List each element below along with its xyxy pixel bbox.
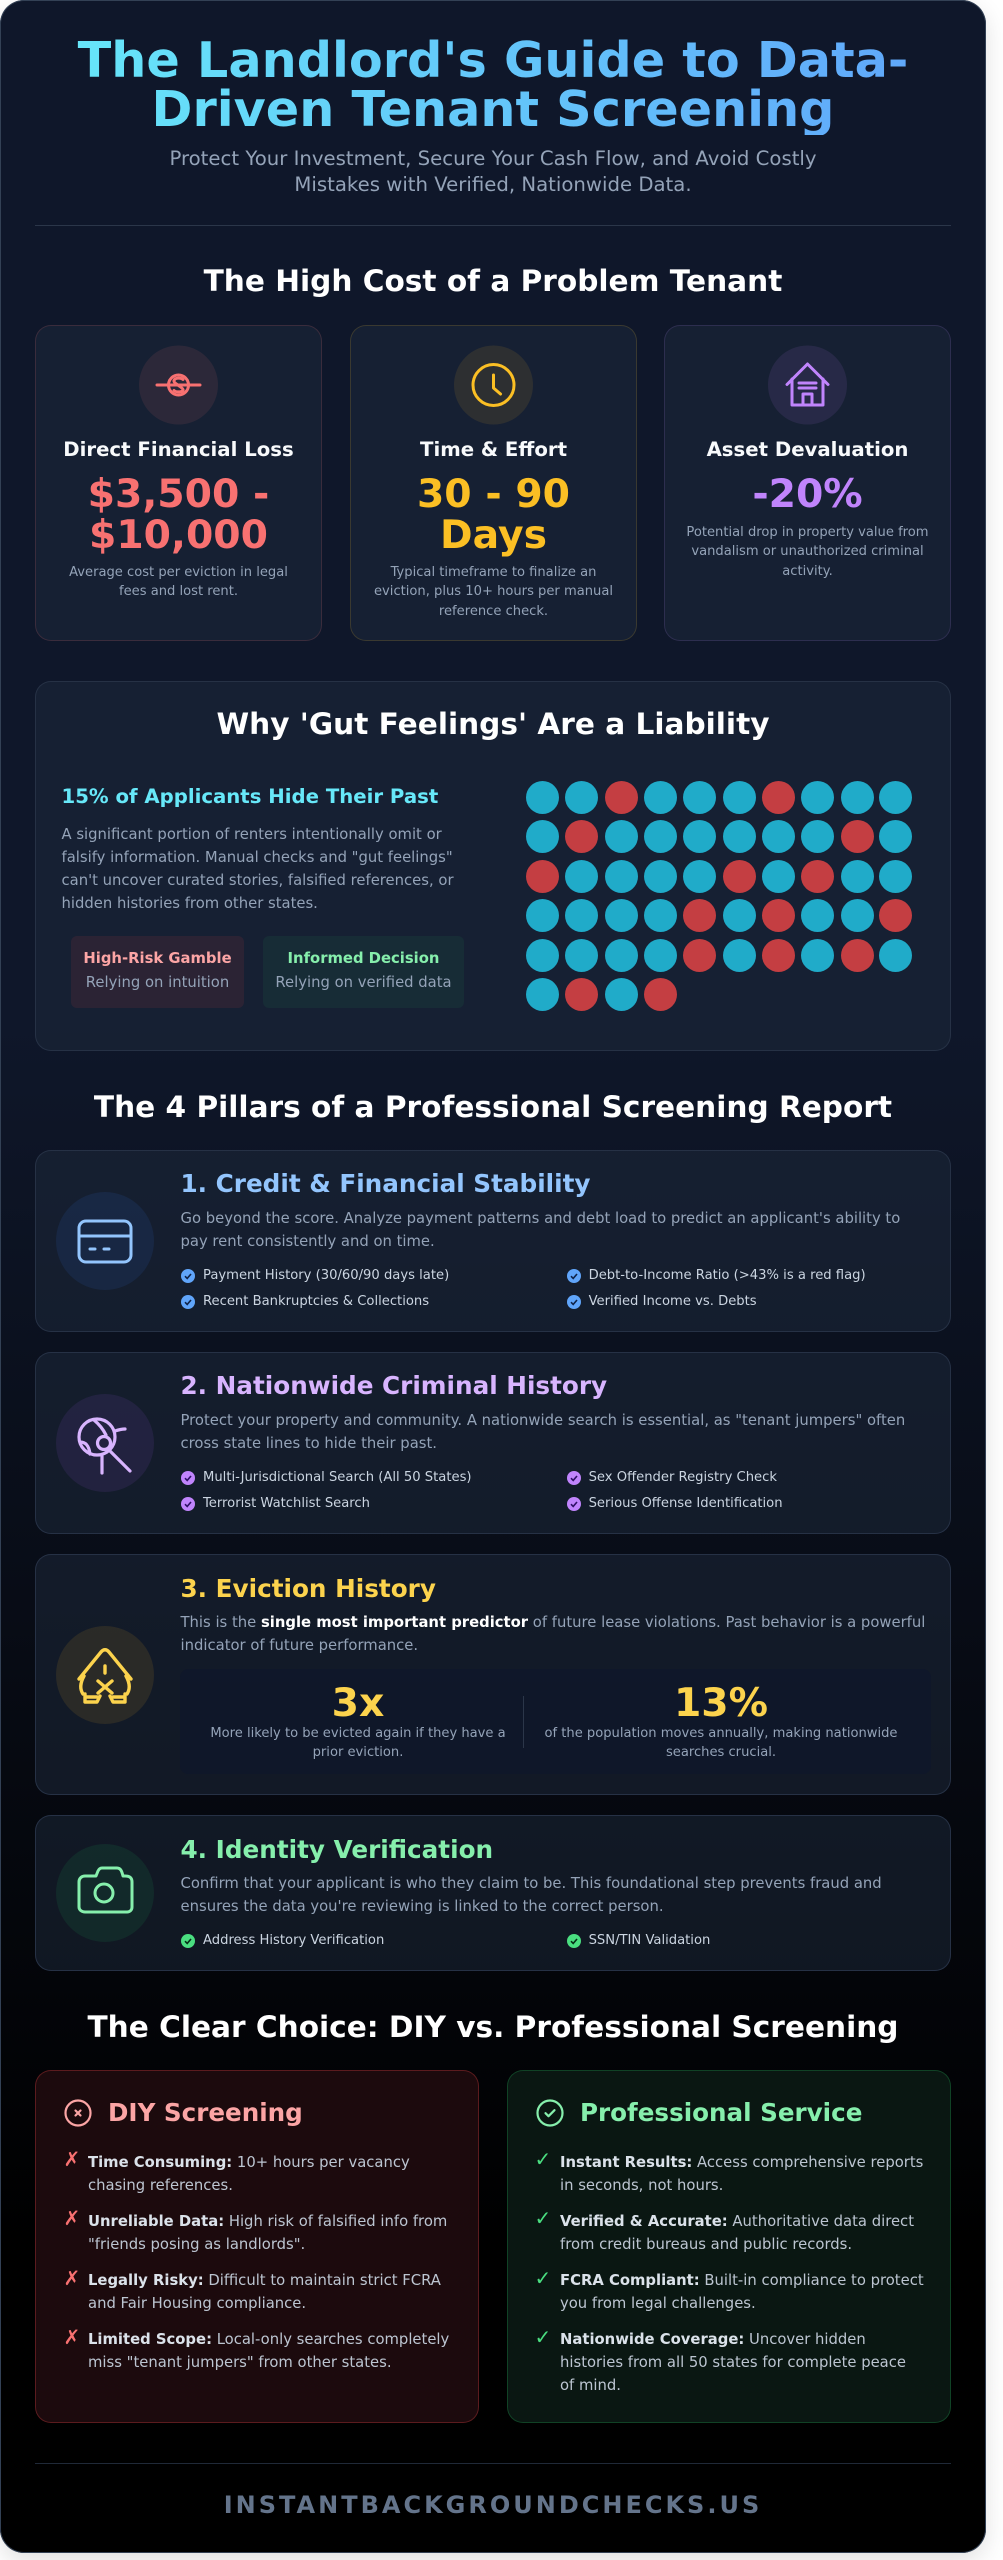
pillar description xyxy=(180,1412,905,1452)
list: DIY drawbacks: Unreliable Data: High risk of falsified info from xyxy=(88,2213,447,2230)
list: professional benefits xyxy=(534,2147,924,2394)
stat: Days xyxy=(440,513,547,558)
card title: Time & Effort xyxy=(420,438,567,460)
heading: four pillars: The 4 Pillars of a Professional Screening Report xyxy=(94,1090,892,1124)
callout: informed decision: Informed Decision xyxy=(288,950,439,967)
panel: direct financial loss xyxy=(35,325,322,641)
stat: 30 - 90 xyxy=(417,472,570,517)
checklist xyxy=(181,1933,710,1948)
description: vandalism or unauthorized criminal xyxy=(691,544,924,559)
checklist: Recent Bankruptcies & Collections xyxy=(203,1294,429,1309)
stat xyxy=(88,472,269,558)
pillar description: This is the single most important predictor of future lease violations. Past behavior is a powerful xyxy=(180,1614,925,1631)
list: professional benefits: Nationwide Coverage: Uncover hidden xyxy=(560,2331,866,2348)
icon: camera xyxy=(56,1844,154,1942)
list: DIY drawbacks: ✗ xyxy=(64,2147,80,2171)
panel: pillar 4 identity xyxy=(35,1815,951,1971)
pillar description: Protect your property and community. A nationwide search is essential, as "tenant jumpers" often xyxy=(180,1412,905,1429)
list: professional benefits: of mind. xyxy=(560,2377,621,2394)
checklist: Multi-Jurisdictional Search (All 50 States) xyxy=(203,1470,472,1485)
pillar title: 4. Identity Verification xyxy=(180,1835,493,1864)
panel: pillar 1 credit xyxy=(35,1150,951,1332)
paragraph: falsify information. Manual checks and "gut feelings" xyxy=(62,849,453,866)
description: Potential drop in property value from xyxy=(686,524,929,540)
description: Average cost per eviction in legal xyxy=(69,564,288,580)
paragraph xyxy=(62,826,454,912)
list: professional benefits: ✓ xyxy=(534,2206,551,2230)
checklist: SSN/TIN Validation xyxy=(589,1933,710,1948)
stats box xyxy=(180,1669,931,1774)
callout: high-risk gamble xyxy=(71,936,244,1008)
stat: 3x xyxy=(210,1681,506,1760)
description xyxy=(374,564,613,619)
list: professional benefits: ✓ xyxy=(534,2266,551,2290)
paragraph: hidden histories from other states. xyxy=(62,895,318,912)
icon: house xyxy=(768,346,847,424)
panel: professional service xyxy=(507,2070,951,2423)
description: fees and lost rent. xyxy=(119,584,238,599)
panel: pillar 3 eviction xyxy=(35,1554,951,1795)
pillar description: cross state lines to hide their past. xyxy=(180,1435,437,1452)
panel: gut feelings xyxy=(35,681,951,1051)
title: Driven Tenant Screening xyxy=(152,80,834,138)
subtitle xyxy=(169,147,817,196)
list: professional benefits: Instant Results: Access comprehensive reports xyxy=(560,2154,923,2170)
stat: 3x: More likely to be evicted again if they have a xyxy=(210,1726,506,1740)
list: DIY drawbacks: chasing references. xyxy=(88,2176,233,2194)
heading: Why 'Gut Feelings' Are a Liability xyxy=(216,707,770,741)
heading: high cost: The High Cost of a Problem Tenant xyxy=(204,264,782,298)
checklist: Address History Verification xyxy=(203,1933,384,1948)
checklist: Serious Offense Identification xyxy=(589,1496,783,1511)
subtitle: Protect Your Investment, Secure Your Cash Flow, and Avoid Costly xyxy=(169,147,817,170)
stat: $3,500 - xyxy=(88,472,269,517)
description: Typical timeframe to finalize an xyxy=(391,564,596,580)
list: DIY drawbacks: Limited Scope: Local-only searches completely xyxy=(88,2331,449,2348)
list: DIY drawbacks: Time Consuming: 10+ hours per vacancy xyxy=(88,2154,410,2170)
pillar description: Confirm that your applicant is who they claim to be. This foundational step prevents fraud and xyxy=(180,1875,882,1892)
description xyxy=(69,564,288,599)
panel: time and effort xyxy=(350,325,637,641)
description: activity. xyxy=(782,564,833,579)
list: professional benefits: ✓ xyxy=(534,2147,551,2171)
panel: pillar 2 criminal xyxy=(35,1352,951,1534)
icon: x circle xyxy=(64,2099,92,2127)
chart: dot grid 15 percent xyxy=(526,781,912,1011)
list: professional benefits: histories from all 50 states for complete peace xyxy=(560,2354,906,2371)
list: DIY drawbacks: ✗ xyxy=(64,2206,80,2230)
icon: globe search xyxy=(56,1394,154,1492)
description: reference check. xyxy=(439,604,548,619)
description: eviction, plus 10+ hours per manual xyxy=(374,584,613,599)
pillar title: 2. Nationwide Criminal History xyxy=(180,1371,607,1400)
callout: high-risk gamble: Relying on intuition xyxy=(86,974,229,991)
list: DIY drawbacks: and Fair Housing compliance. xyxy=(88,2295,306,2312)
panel heading: Professional Service xyxy=(580,2098,862,2127)
card title: Direct Financial Loss xyxy=(63,438,294,460)
pillar title: 1. Credit & Financial Stability xyxy=(180,1169,590,1198)
list: DIY drawbacks: ✗ xyxy=(64,2266,80,2290)
icon: house warning xyxy=(56,1626,154,1724)
pillar description xyxy=(180,1614,925,1654)
stat: 3x: 3x xyxy=(332,1681,384,1726)
heading: clear choice: The Clear Choice: DIY vs. Professional Screening xyxy=(87,2010,898,2044)
list: DIY drawbacks: miss "tenant jumpers" from other states. xyxy=(88,2354,392,2371)
paragraph: can't uncover curated stories, falsified references, or xyxy=(62,872,454,889)
checklist: Payment History (30/60/90 days late) xyxy=(203,1268,449,1283)
pillar description: ensures the data you're reviewing is linked to the correct person. xyxy=(180,1898,664,1915)
pillar description: pay rent consistently and on time. xyxy=(180,1233,435,1250)
card title: Asset Devaluation xyxy=(707,438,908,460)
pillar title: 3. Eviction History xyxy=(180,1574,436,1602)
list: DIY drawbacks: ✗ xyxy=(64,2324,80,2348)
title xyxy=(35,36,951,135)
pillar description: indicator of future performance. xyxy=(180,1637,418,1654)
panel: DIY screening xyxy=(35,2070,479,2423)
icon: clock xyxy=(454,346,533,424)
list: DIY drawbacks xyxy=(64,2147,449,2371)
panel heading: DIY Screening xyxy=(108,2098,303,2127)
subheading: 15% of Applicants Hide Their Past xyxy=(62,785,438,808)
list: professional benefits: you from legal challenges. xyxy=(560,2295,756,2312)
panel: asset devaluation xyxy=(664,325,951,641)
checklist xyxy=(181,1268,866,1309)
icon: check circle xyxy=(536,2099,564,2127)
stat: 13 percent: of the population moves annually, making nationwide xyxy=(544,1726,898,1740)
checklist: Sex Offender Registry Check xyxy=(589,1470,777,1485)
checklist: Verified Income vs. Debts xyxy=(589,1294,757,1309)
checklist: Terrorist Watchlist Search xyxy=(203,1496,370,1511)
pillar description xyxy=(180,1210,900,1250)
list: professional benefits: in seconds, not hours. xyxy=(560,2176,723,2194)
list: professional benefits: from credit bureaus and public records. xyxy=(560,2236,852,2253)
callout: informed decision: Relying on verified data xyxy=(275,974,452,991)
stat: 13 percent: 13% xyxy=(674,1681,768,1726)
title: The Landlord's Guide to Data- xyxy=(78,31,908,89)
stat: 13 percent xyxy=(544,1681,898,1760)
icon: credit card xyxy=(56,1192,154,1290)
icon: dollar xyxy=(139,346,218,424)
stat: 13 percent: searches crucial. xyxy=(666,1745,776,1760)
stat: 3x: prior eviction. xyxy=(313,1745,403,1760)
footer brand: INSTANTBACKGROUNDCHECKS.US xyxy=(224,2491,762,2519)
stat: $10,000 xyxy=(89,513,268,558)
stat: -20% xyxy=(752,472,863,517)
stat xyxy=(417,472,570,558)
callout: high-risk gamble: High-Risk Gamble xyxy=(83,950,232,967)
pillar description xyxy=(180,1875,882,1915)
list: professional benefits: ✓ xyxy=(534,2324,551,2348)
callout: informed decision xyxy=(263,936,464,1008)
checklist xyxy=(181,1470,783,1511)
list: professional benefits: Verified & Accurate: Authoritative data direct xyxy=(560,2213,914,2230)
list: DIY drawbacks: "friends posing as landlords". xyxy=(88,2236,305,2253)
checklist: Debt-to-Income Ratio (>43% is a red flag) xyxy=(589,1268,866,1283)
paragraph: A significant portion of renters intentionally omit or xyxy=(62,826,442,843)
subtitle: Mistakes with Verified, Nationwide Data. xyxy=(294,173,692,196)
list: DIY drawbacks: Legally Risky: Difficult to maintain strict FCRA xyxy=(88,2272,441,2289)
description xyxy=(686,524,929,579)
pillar description: Go beyond the score. Analyze payment patterns and debt load to predict an applicant's ability to xyxy=(180,1210,900,1227)
list: professional benefits: FCRA Compliant: Built-in compliance to protect xyxy=(560,2272,924,2289)
